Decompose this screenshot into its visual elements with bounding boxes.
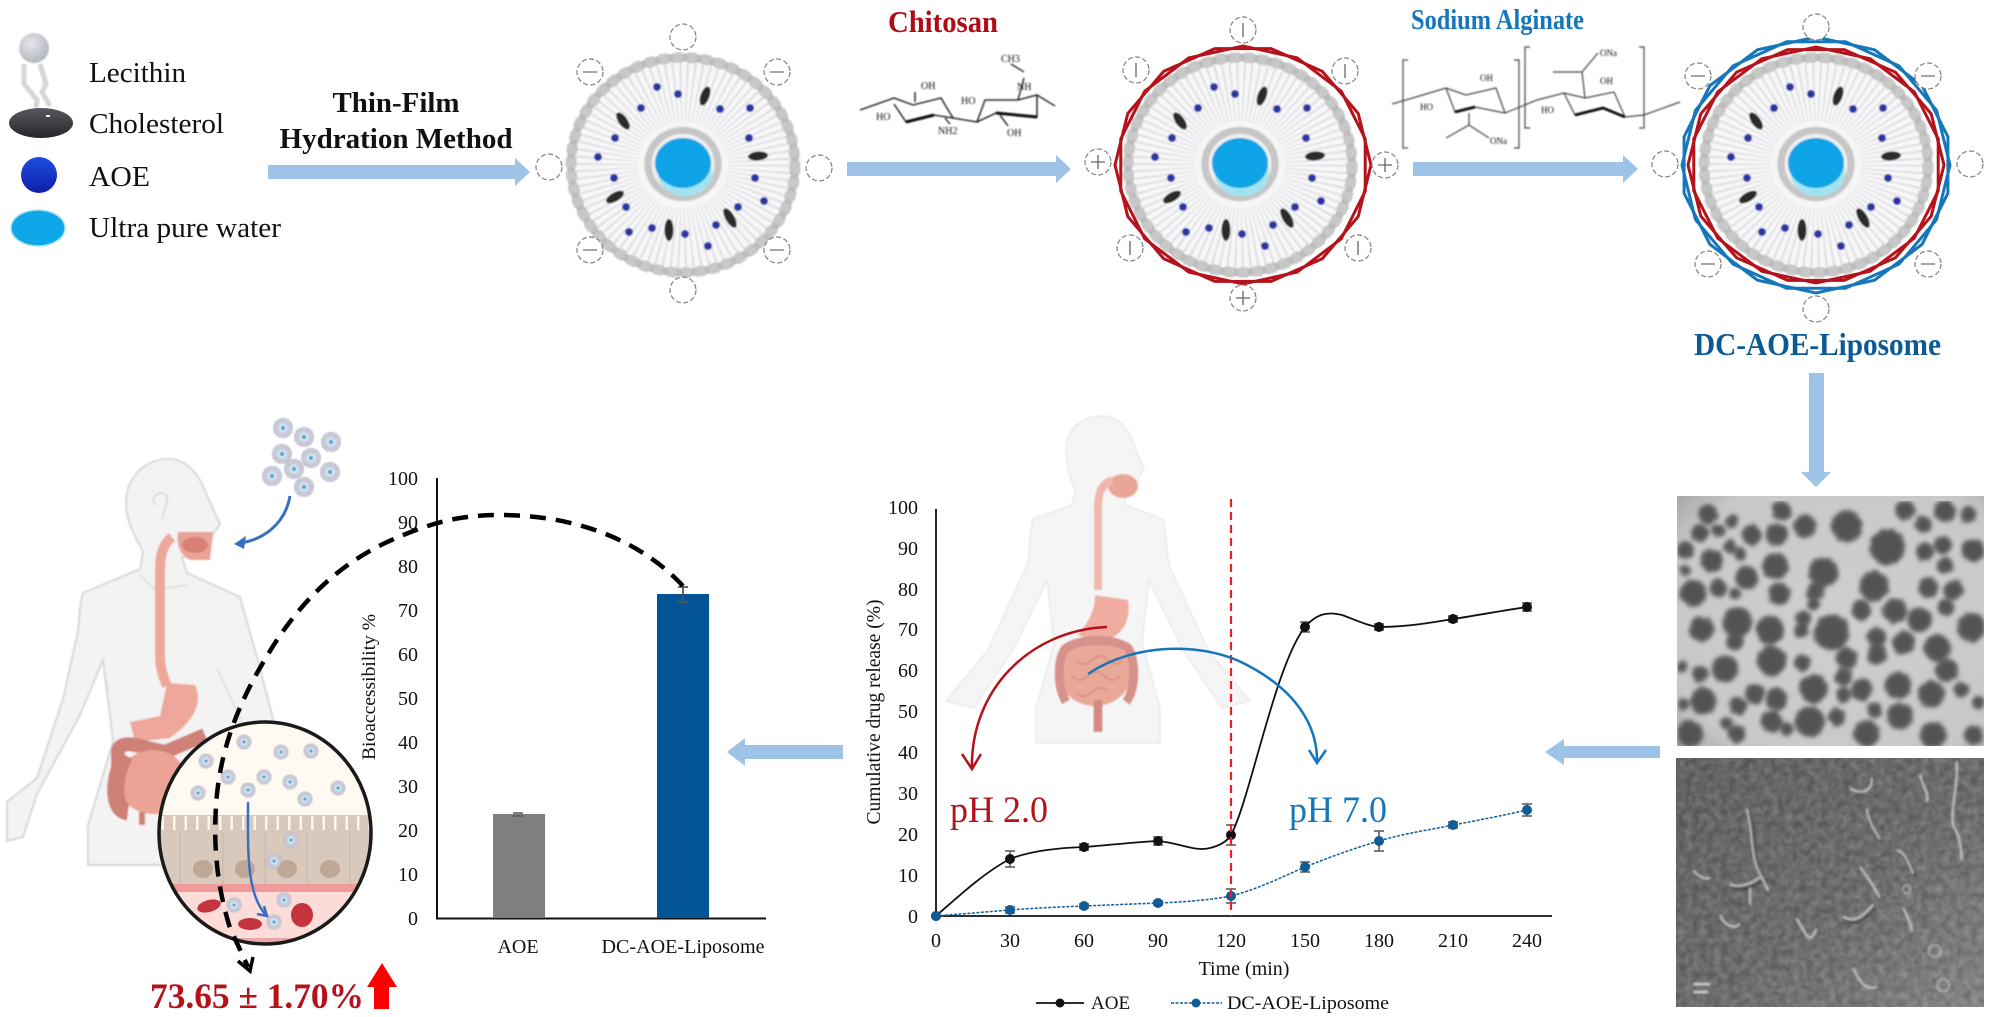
chitosan-coated liposome [1085, 17, 1398, 311]
blue alginate ring [1682, 37, 1950, 293]
y axis labels [888, 497, 918, 928]
y axis labels: 50 [398, 688, 418, 710]
x axis labels: 60 [1074, 930, 1094, 952]
free liposome particles [262, 418, 340, 496]
arrow: stomach to pH 2.0 [962, 627, 1107, 769]
series: AOE [931, 602, 1532, 921]
y axis labels: 90 [898, 538, 918, 560]
alginate structure: ONa [1490, 136, 1507, 146]
icon: AOE [21, 157, 57, 193]
callout: 73.65 value: 73.65 ± 1.70% [150, 976, 364, 1016]
magnified intestine lens [157, 720, 373, 946]
label: pH 2.0: pH 2.0 [950, 790, 1048, 831]
y axis labels: 80 [398, 556, 418, 578]
DC-AOE-liposome [1652, 14, 1983, 322]
legend labels: Lecithin [89, 58, 186, 89]
y axis labels [388, 468, 418, 930]
y axis labels: 100 [888, 497, 918, 519]
bar chart: bioaccessibility [359, 468, 766, 958]
x axis title: Time (min) [1199, 958, 1289, 980]
red dashed divider at 120 min [1230, 499, 1232, 916]
x axis labels: 180 [1364, 930, 1394, 952]
x axis labels [931, 930, 1542, 952]
alginate structure: OH [1480, 73, 1493, 83]
charges: chitosan positive [1085, 17, 1398, 311]
x axis labels: 240 [1512, 930, 1542, 952]
body illustration with gut [946, 416, 1250, 743]
legend labels: Cholesterol [89, 109, 224, 140]
chitosan structure: NH [1017, 82, 1031, 93]
liposome [536, 24, 832, 303]
x labels: AOE [497, 936, 539, 958]
y axis labels: 70 [898, 619, 918, 641]
series: DC-AOE-Liposome [931, 804, 1532, 921]
icon: ultra pure water [11, 210, 65, 246]
red chitosan ring [1115, 46, 1371, 284]
y axis labels: 90 [398, 512, 418, 534]
y axis labels: 20 [398, 820, 418, 842]
y axis labels: 50 [898, 701, 918, 723]
y axis labels: 20 [898, 824, 918, 846]
x axis labels: 210 [1438, 930, 1468, 952]
chitosan structure: HO [961, 96, 975, 107]
y axis labels: 0 [408, 908, 418, 930]
icon: red up arrow [367, 963, 397, 1009]
x axis labels: 0 [931, 930, 941, 952]
heading: thin-film hydration method: Thin-Film [332, 88, 460, 119]
y axis labels: 100 [388, 468, 418, 490]
y axis labels: 40 [398, 732, 418, 754]
label: sodium alginate: Sodium Alginate [1411, 4, 1584, 36]
chitosan structure: NH2 [938, 126, 957, 137]
label: pH 7.0: pH 7.0 [1289, 790, 1387, 831]
icon: lecithin [19, 33, 50, 108]
x axis labels: 120 [1216, 930, 1246, 952]
y axis labels: 10 [398, 864, 418, 886]
x axis labels: 30 [1000, 930, 1020, 952]
icon: cholesterol [9, 108, 73, 138]
alginate structure: HO [1541, 105, 1554, 115]
y axis labels: 70 [398, 600, 418, 622]
label: DC-AOE-Liposome: DC-AOE-Liposome [1694, 326, 1941, 362]
arrow: micrographs to release chart [1545, 739, 1660, 765]
chart legend [1036, 993, 1389, 1014]
alginate structure: OH [1600, 76, 1613, 86]
x axis labels: 150 [1290, 930, 1320, 952]
micrograph: SEM [1676, 758, 1984, 1007]
chitosan structure: OH [1007, 128, 1021, 139]
y axis title: Cumulative drug release (%) [863, 600, 885, 824]
y axis labels: 0 [908, 906, 918, 928]
line chart: cumulative drug release [863, 416, 1552, 1014]
y axis labels: 30 [398, 776, 418, 798]
chart legend: AOE [1091, 993, 1130, 1014]
chitosan structure: HO [876, 112, 890, 123]
legend labels [89, 58, 282, 244]
arrow: intestine to pH 7.0 [1088, 649, 1326, 763]
x labels [497, 936, 765, 958]
red chitosan ring [1688, 47, 1944, 283]
arrow: down to micrographs [1801, 373, 1831, 487]
y axis labels: 30 [898, 783, 918, 805]
axes [437, 478, 766, 918]
y axis labels: 40 [898, 742, 918, 764]
legend labels: AOE [89, 162, 150, 193]
alginate structure: HO [1420, 102, 1433, 112]
chitosan structure: CH3 [1001, 54, 1020, 65]
legend labels: Ultra pure water [89, 213, 282, 244]
y axis labels: 80 [898, 579, 918, 601]
dashed arrow: bar value to body [215, 515, 683, 967]
micrograph: TEM [1677, 496, 1984, 747]
arrowhead: dashed arrow end [238, 957, 253, 971]
charges: alginate negative [1652, 14, 1983, 322]
bar: AOE [493, 813, 545, 918]
alginate structure [1392, 47, 1680, 148]
y axis title: Bioaccessibility % [359, 614, 380, 760]
arrow: absorption [248, 802, 267, 916]
arrow: chitosan step [847, 155, 1071, 183]
y axis labels: 10 [898, 865, 918, 887]
body illustration: digestive tract [7, 459, 273, 865]
alginate structure: ONa [1600, 48, 1617, 58]
x labels: DC-AOE-Liposome [602, 936, 765, 958]
y axis labels: 60 [898, 660, 918, 682]
heading: thin-film hydration method: Hydration Method [280, 124, 513, 155]
lens particles [191, 735, 345, 929]
y axis labels: 60 [398, 644, 418, 666]
arrow: particles to mouth [234, 496, 290, 549]
arrow: thin-film to liposome [268, 158, 530, 186]
arrow: release chart to bar chart [727, 738, 843, 766]
legend [9, 33, 282, 246]
arrow: alginate step [1413, 155, 1638, 183]
charges: liposome negative [536, 24, 832, 303]
chitosan structure [860, 54, 1055, 139]
x axis labels: 90 [1148, 930, 1168, 952]
heading: thin-film hydration method [280, 88, 513, 155]
label: chitosan: Chitosan [888, 4, 998, 39]
bar: DC-AOE-Liposome [657, 587, 709, 918]
axes [936, 509, 1552, 916]
chart legend: DC-AOE-Liposome [1227, 993, 1389, 1014]
chitosan structure: OH [921, 81, 935, 92]
